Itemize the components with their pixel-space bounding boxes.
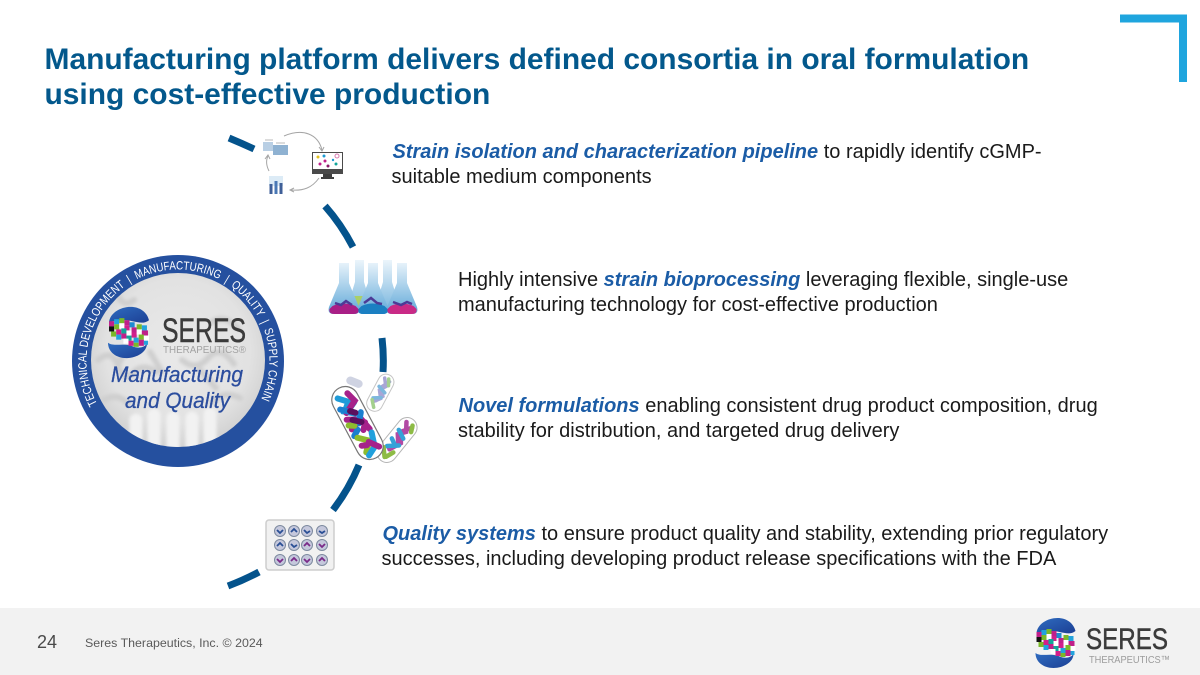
tubes bbox=[269, 176, 283, 186]
page number: 24 bbox=[37, 632, 57, 652]
large capsule bbox=[327, 382, 388, 464]
ring text: TECHNICAL DEVELOPMENT | MANUFACTURING | QUALITY | SUPPLY CHAIN bbox=[78, 261, 278, 408]
badge caption: Manufacturing bbox=[111, 362, 244, 387]
text: strain isolation: Strain isolation and characterization pipeline to rapidly identify cGMP- bbox=[392, 141, 1042, 163]
text: novel formulations: stability for distribution, and targeted drug delivery bbox=[458, 420, 899, 442]
title: using cost-effective production bbox=[44, 78, 490, 111]
text: strain isolation: suitable medium components bbox=[392, 166, 652, 188]
text: strain isolation bbox=[392, 141, 1042, 188]
documents bbox=[263, 142, 273, 151]
badge logo wordmark bbox=[162, 312, 246, 356]
footer logo: SERES bbox=[1086, 623, 1168, 656]
copyright: Seres Therapeutics, Inc. © 2024 bbox=[85, 636, 263, 650]
icon: flasks bbox=[329, 260, 417, 314]
text: quality systems bbox=[382, 523, 1108, 570]
badge: manufacturing and quality bbox=[72, 255, 284, 467]
cycle arrows bbox=[265, 132, 324, 192]
text: novel formulations bbox=[458, 395, 1098, 442]
text: quality systems: Quality systems to ensure product quality and stability, extending prior regulatory bbox=[382, 523, 1108, 545]
badge logo wordmark: SERES bbox=[162, 312, 246, 350]
monitor bbox=[312, 152, 343, 174]
text: strain bioprocessing: manufacturing technology for cost-effective production bbox=[458, 294, 938, 316]
medium capsule bbox=[373, 414, 421, 466]
footer logo bbox=[1036, 618, 1170, 668]
badge caption: and Quality bbox=[125, 388, 232, 413]
title: Manufacturing platform delivers defined consortia in oral formulation bbox=[44, 43, 1029, 76]
icon: well plate bbox=[266, 520, 334, 570]
badge logo mark bbox=[108, 307, 149, 358]
badge logo wordmark: THERAPEUTICS® bbox=[163, 344, 246, 356]
footer bbox=[0, 608, 1200, 675]
badge caption bbox=[111, 362, 244, 413]
badge background texture bbox=[98, 296, 240, 454]
footer logo: THERAPEUTICS™ bbox=[1089, 654, 1170, 666]
text: strain bioprocessing: Highly intensive strain bioprocessing leveraging flexible, single-use bbox=[458, 269, 1068, 291]
icon: strain isolation cycle bbox=[263, 132, 343, 194]
text: strain bioprocessing bbox=[458, 269, 1068, 316]
text: novel formulations: Novel formulations enabling consistent drug product composition, drug bbox=[458, 395, 1098, 417]
text: quality systems: successes, including developing product release specifications with the FDA bbox=[382, 548, 1057, 570]
title bbox=[44, 43, 1029, 111]
icon: capsules bbox=[327, 371, 421, 466]
small capsule bbox=[364, 371, 397, 414]
faded blob bbox=[345, 375, 364, 389]
corner bracket bbox=[1120, 18, 1183, 82]
connecting arc segments bbox=[228, 138, 383, 586]
